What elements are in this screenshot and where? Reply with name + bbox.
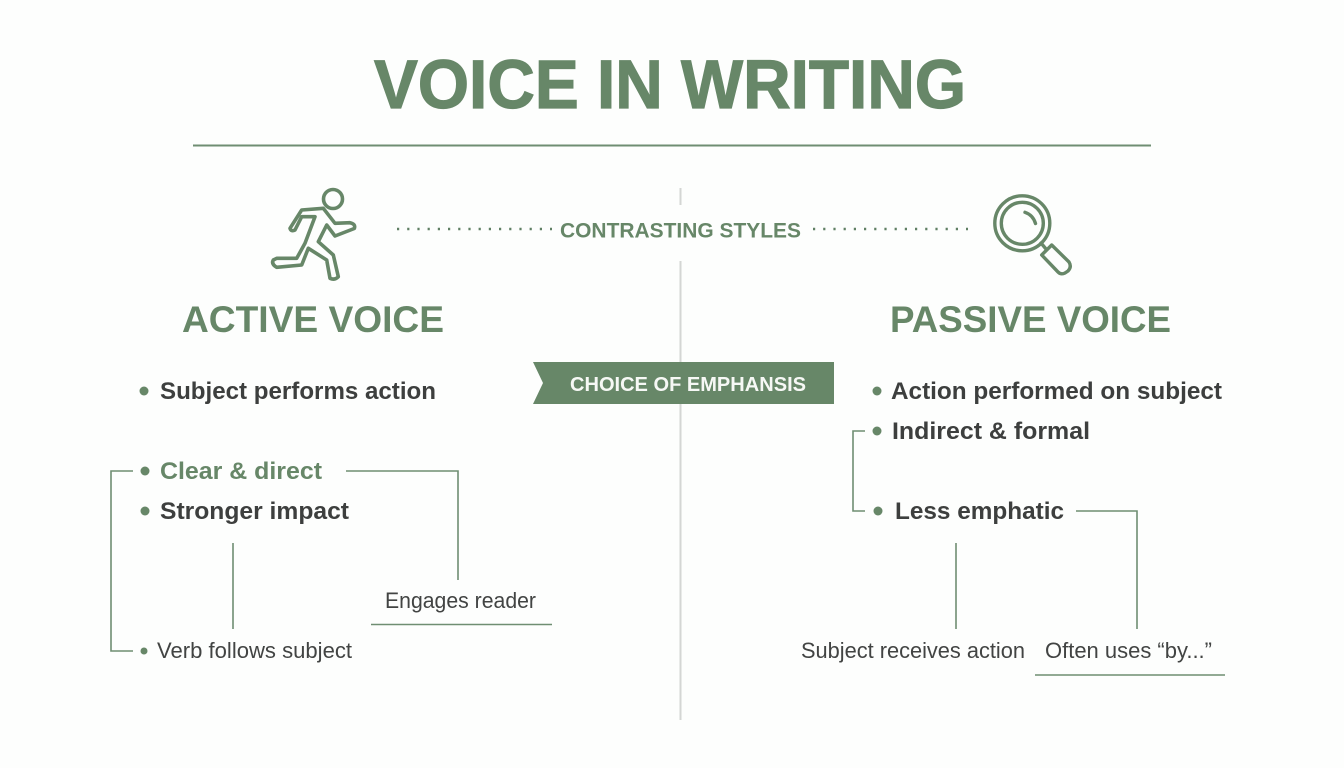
label: engages reader: Engages reader	[385, 588, 536, 613]
connector to engages reader	[346, 471, 458, 580]
connector to often uses by	[1076, 511, 1137, 629]
vertical stem	[955, 543, 957, 629]
bullet: action performed on subject: Action performed on subject	[891, 378, 1222, 405]
icon: magnifying glass	[995, 196, 1070, 274]
bracket connector	[111, 471, 133, 651]
icon: runner	[273, 190, 355, 279]
contrasting styles label with dotted leaders: CONTRASTING STYLES	[560, 218, 801, 242]
banner: choice of emphasis	[533, 362, 834, 404]
bullet: subject performs action: Subject performs action	[160, 378, 436, 405]
bullet: less emphatic: Less emphatic	[895, 498, 1064, 525]
heading: passive voice: PASSIVE VOICE	[890, 299, 1171, 340]
bullet: stronger impact: Stronger impact	[160, 498, 349, 525]
label: often uses by: Often uses “by...”	[1045, 638, 1212, 663]
bullet: indirect and formal: Indirect & formal	[892, 418, 1090, 445]
heading: active voice: ACTIVE VOICE	[182, 299, 444, 340]
bullet: clear and direct: Clear & direct	[160, 458, 322, 485]
banner: choice of emphasis: CHOICE OF EMPHANSIS	[570, 374, 806, 396]
panel: passive voice list	[801, 378, 1225, 675]
title: VOICE IN WRITING	[374, 46, 966, 123]
bullet: verb follows subject: Verb follows subject	[157, 638, 352, 663]
label: subject receives action: Subject receives action	[801, 638, 1025, 663]
panel: active voice list	[111, 378, 552, 663]
vertical stem	[232, 543, 234, 629]
bracket connector	[853, 431, 865, 511]
